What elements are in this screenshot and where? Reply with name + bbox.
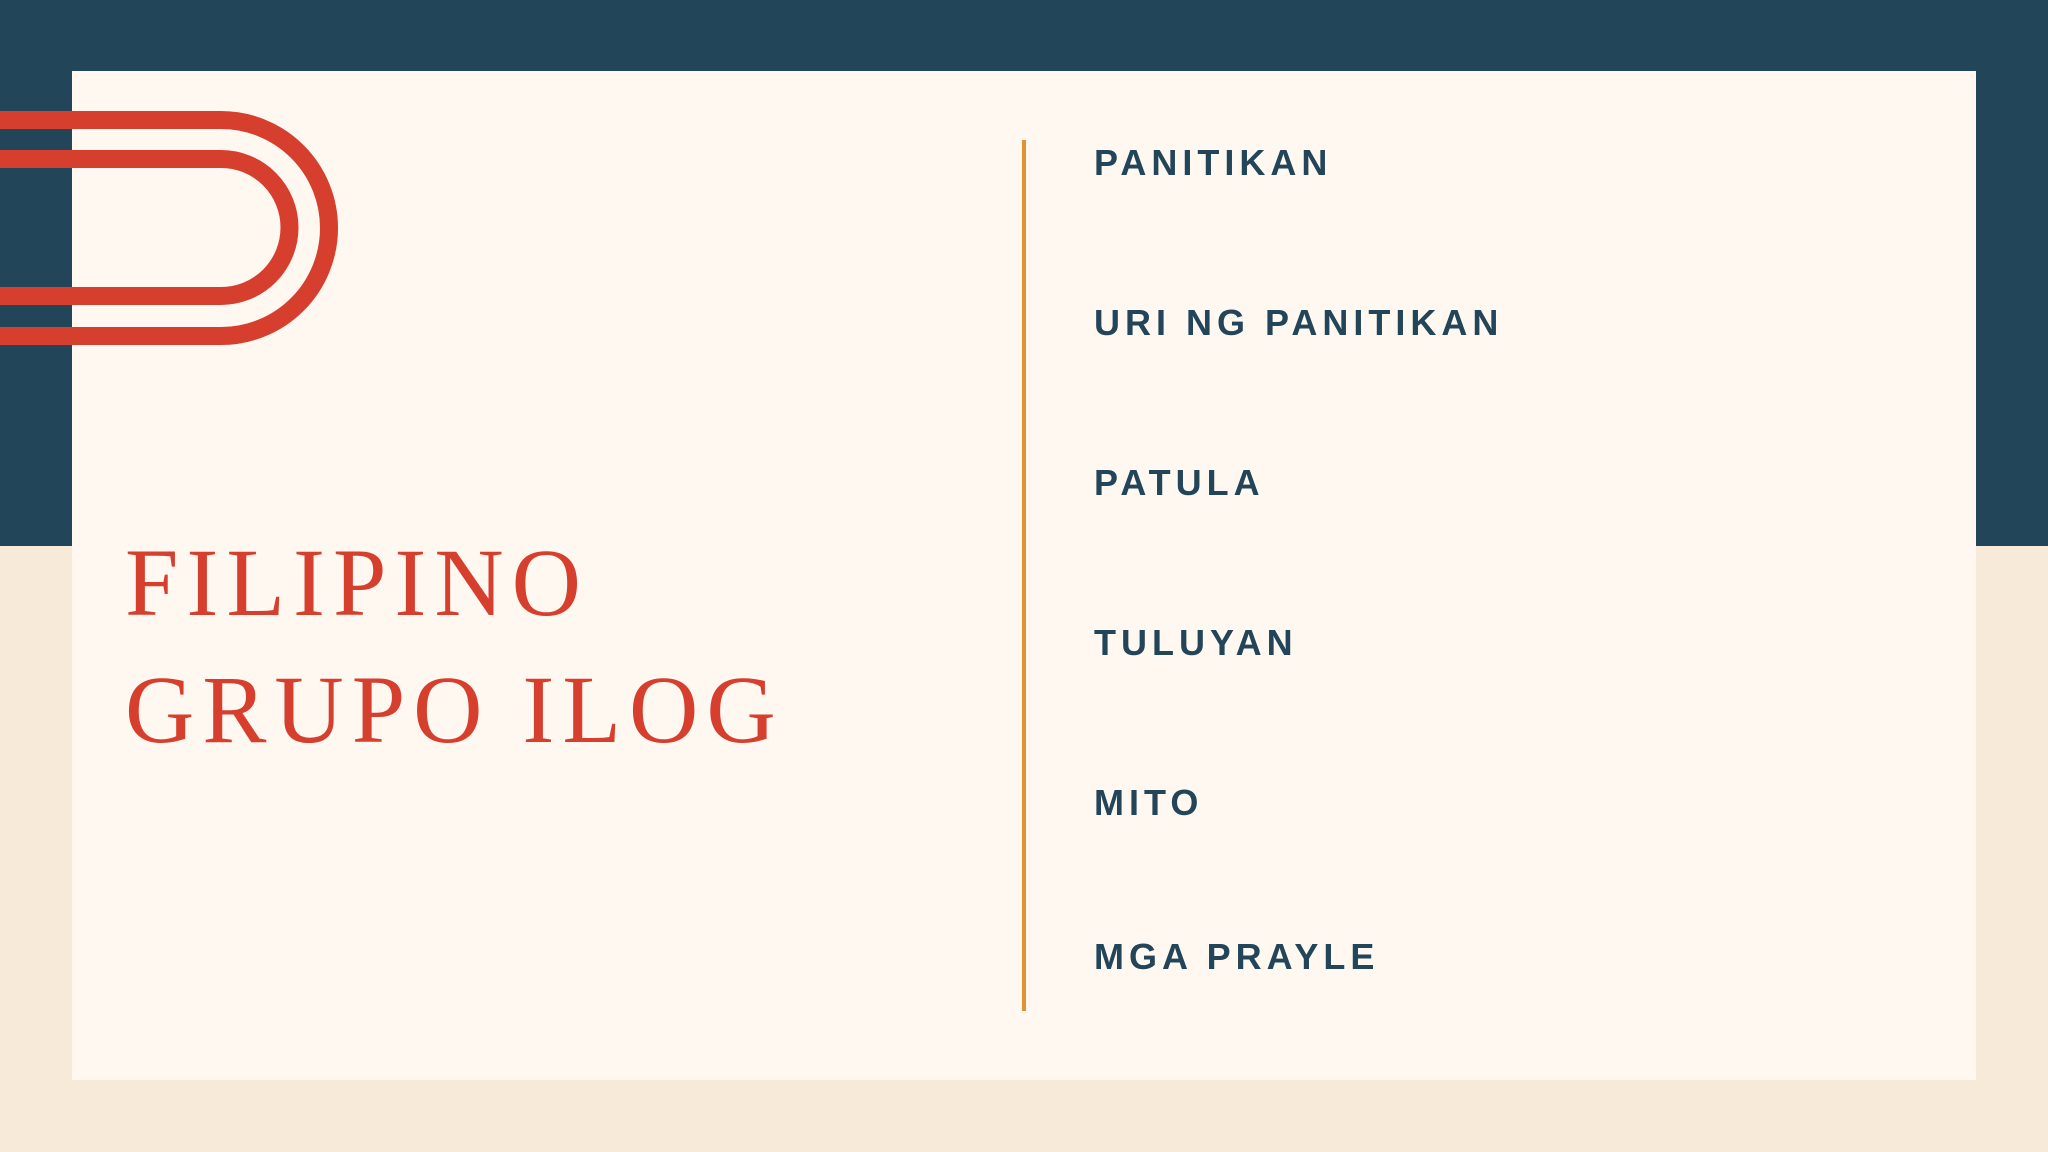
item: mito: MITO <box>1094 782 1203 823</box>
item: mga prayle: MGA PRAYLE <box>1094 936 1379 977</box>
decorative red loops <box>0 111 338 345</box>
item: tuluyan: TULUYAN <box>1094 622 1298 663</box>
top dark band <box>0 0 2048 546</box>
item: panitikan: PANITIKAN <box>1094 142 1332 183</box>
title: FILIPINO <box>125 529 589 636</box>
title <box>125 529 784 763</box>
topic list <box>1094 142 1503 977</box>
vertical divider <box>1022 140 1026 1011</box>
title: GRUPO ILOG <box>125 656 784 763</box>
item: uri ng panitikan: URI NG PANITIKAN <box>1094 302 1503 343</box>
item: patula: PATULA <box>1094 462 1265 503</box>
